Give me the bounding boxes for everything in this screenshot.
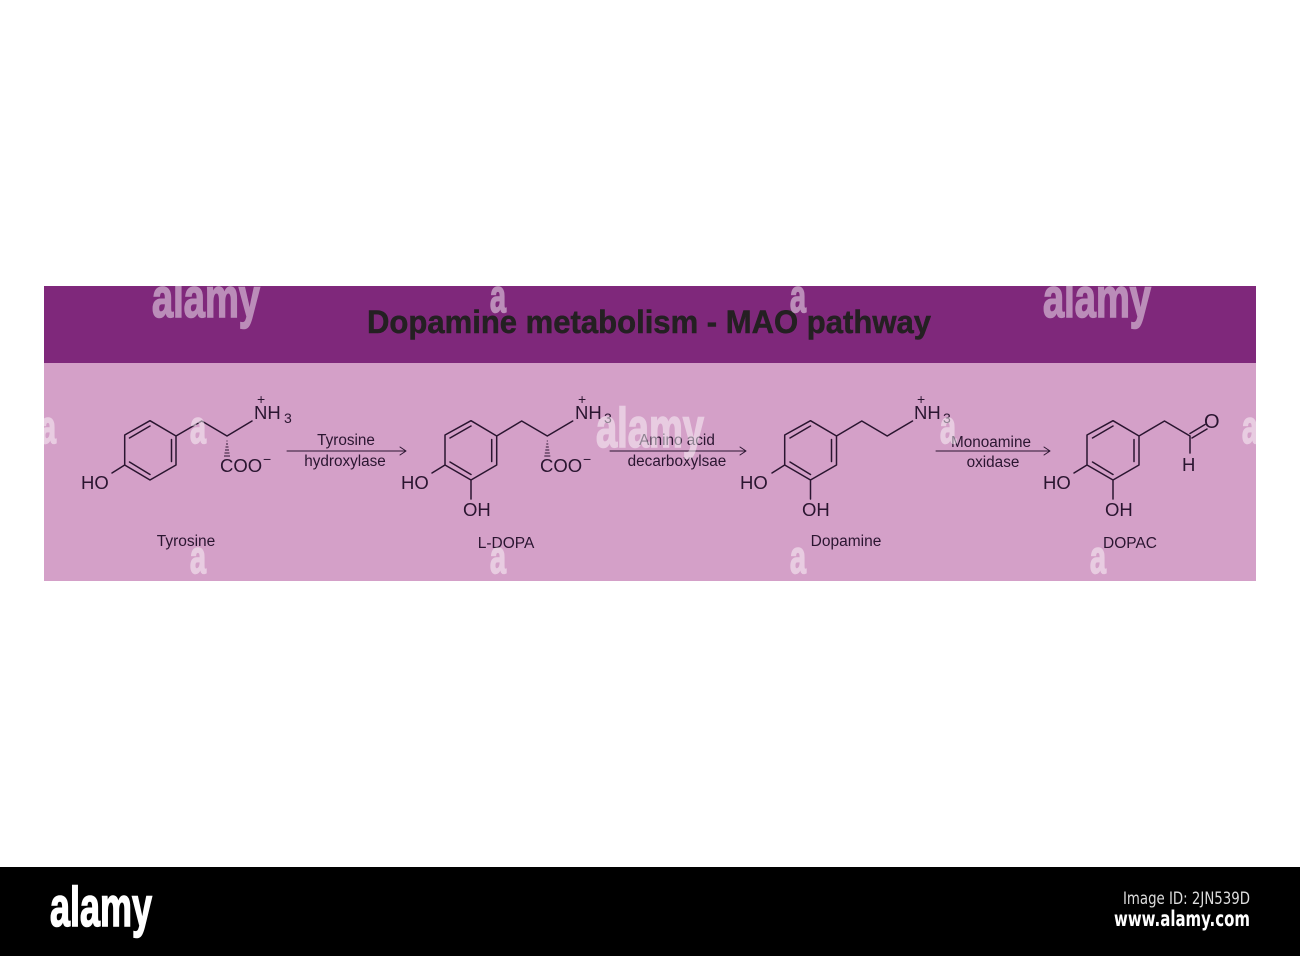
watermarks: a xyxy=(790,531,806,583)
arrow: tyrosine hydroxylase xyxy=(287,432,406,470)
molecule: DOPAC: OH xyxy=(1105,499,1133,520)
molecule: L-DOPA: + xyxy=(578,391,586,407)
molecule: tyrosine: NH xyxy=(254,402,281,423)
footer band: Image ID: 2JN539D xyxy=(1123,889,1250,909)
arrow: tyrosine hydroxylase: Tyrosine xyxy=(317,432,375,449)
watermarks: a xyxy=(40,401,56,453)
molecule: dopamine xyxy=(740,391,951,520)
watermarks: a xyxy=(1242,401,1258,453)
molecule: L-DOPA: 3 xyxy=(604,410,612,426)
molecule: DOPAC: HO xyxy=(1043,472,1071,493)
arrow: amino acid decarboxylase: decarboxylsae xyxy=(628,453,726,470)
molecule: dopamine: HO xyxy=(740,472,768,493)
watermarks: a xyxy=(490,531,506,583)
molecule: dopamine: + xyxy=(917,391,925,407)
arrow: monoamine oxidase xyxy=(936,434,1050,471)
arrow: tyrosine hydroxylase: hydroxylase xyxy=(304,453,386,470)
watermarks: a xyxy=(490,270,506,322)
molecule: DOPAC: H xyxy=(1182,454,1195,475)
watermarks: alamy xyxy=(596,396,704,459)
label: Tyrosine: Tyrosine xyxy=(157,533,215,550)
footer band xyxy=(0,867,1300,956)
arrow: monoamine oxidase: oxidase xyxy=(967,454,1019,471)
molecule: dopamine: NH xyxy=(914,402,941,423)
molecule: tyrosine: + xyxy=(257,391,265,407)
molecule: tyrosine xyxy=(81,391,292,493)
watermarks: a xyxy=(940,401,956,453)
molecule: L-DOPA: OH xyxy=(463,499,491,520)
watermarks: alamy xyxy=(1043,266,1151,329)
label: DOPAC: DOPAC xyxy=(1103,535,1157,552)
molecule: L-DOPA: NH xyxy=(575,402,602,423)
molecule: L-DOPA: − xyxy=(583,451,591,467)
molecule: dopamine: OH xyxy=(802,499,830,520)
watermarks xyxy=(40,266,1258,583)
footer band: www.alamy.com xyxy=(1114,907,1250,931)
molecule: tyrosine: HO xyxy=(81,472,109,493)
label: Dopamine: Dopamine xyxy=(811,533,881,550)
watermarks: a xyxy=(1090,531,1106,583)
label: L-DOPA: L-DOPA xyxy=(478,535,535,552)
watermarks: a xyxy=(190,401,206,453)
watermarks: alamy xyxy=(152,266,260,329)
watermarks: a xyxy=(790,270,806,322)
molecule: L-DOPA: HO xyxy=(401,472,429,493)
arrow: amino acid decarboxylase: Amino acid xyxy=(639,432,715,449)
molecule: tyrosine: COO xyxy=(220,455,262,476)
arrow: amino acid decarboxylase xyxy=(610,432,746,470)
molecule: dopamine: 3 xyxy=(943,410,951,426)
molecule: tyrosine: 3 xyxy=(284,410,292,426)
molecule: DOPAC: O xyxy=(1204,411,1220,433)
title: Dopamine metabolism - MAO pathway xyxy=(367,304,931,340)
molecule: L-DOPA: COO xyxy=(540,455,582,476)
panel: header band xyxy=(44,286,1256,363)
arrow: monoamine oxidase: Monoamine xyxy=(951,434,1031,451)
molecule: tyrosine: − xyxy=(263,451,271,467)
molecule: L-DOPA xyxy=(401,391,612,520)
molecule: DOPAC xyxy=(1043,411,1220,520)
footer band: alamy xyxy=(50,875,152,938)
panel: pathway body xyxy=(44,363,1256,581)
watermarks: a xyxy=(190,531,206,583)
